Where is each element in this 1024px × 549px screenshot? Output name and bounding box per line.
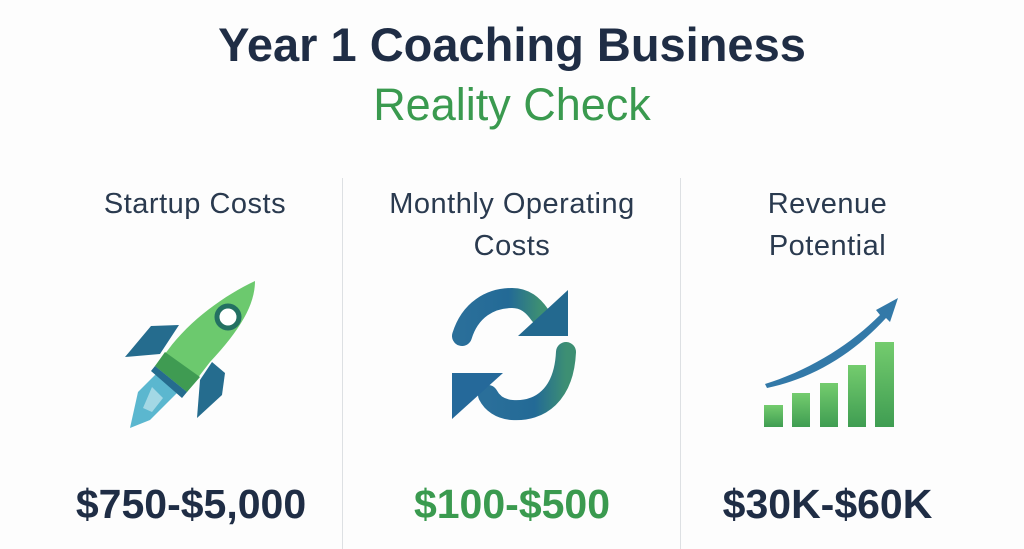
value: monthly: $100-$500 — [414, 481, 610, 527]
heading: monthly operating costs — [389, 188, 635, 262]
icon: refresh arrows — [452, 288, 576, 420]
heading: revenue potential — [768, 188, 887, 262]
value: revenue: $30K-$60K — [723, 481, 932, 527]
heading: monthly operating costs: Monthly Operating — [389, 188, 635, 220]
value: startup: $750-$5,000 — [76, 481, 306, 527]
heading: monthly operating costs: Costs — [474, 230, 550, 262]
icon: rocket — [125, 281, 255, 428]
icon: growth chart — [764, 298, 898, 427]
heading: startup costs: Startup Costs — [104, 188, 286, 220]
heading: revenue potential: Revenue — [768, 188, 887, 220]
title: Year 1 Coaching Business — [218, 18, 806, 71]
subtitle: Reality Check — [373, 79, 651, 130]
heading: revenue potential: Potential — [769, 230, 886, 262]
